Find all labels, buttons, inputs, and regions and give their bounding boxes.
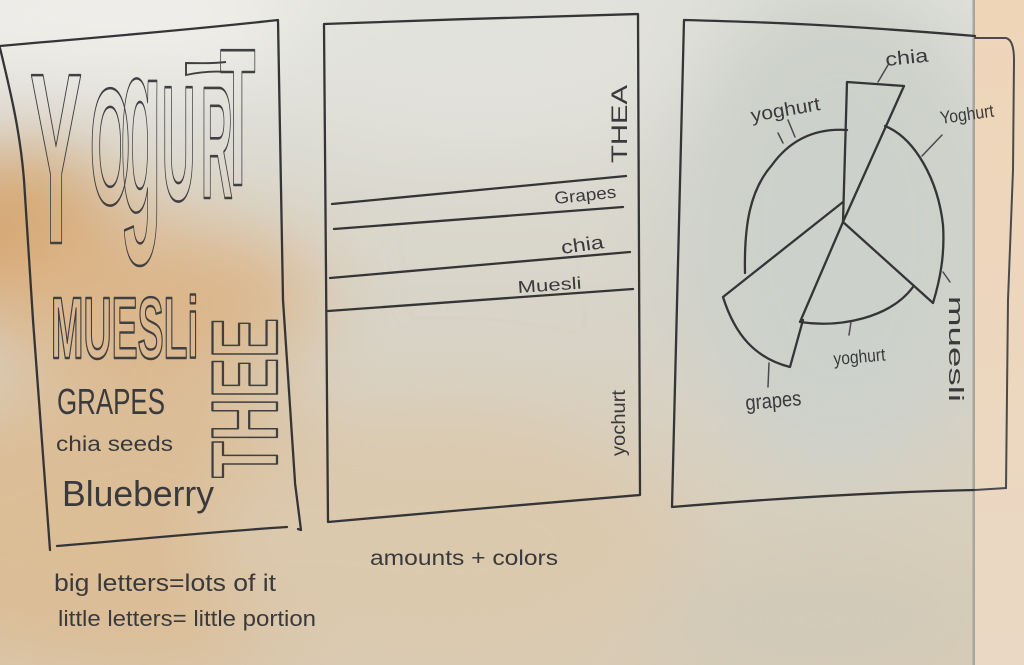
panel 3 outline — [672, 20, 1014, 507]
note: letter size key: big letters=lots of it — [54, 570, 276, 597]
note: letter size key — [54, 570, 316, 631]
slice: yogurt right — [843, 126, 943, 303]
slice: yogurt upper left — [745, 130, 847, 273]
pie chart — [723, 82, 943, 367]
heading: yogurt — [30, 0, 255, 296]
label: blueberry: Blueberry — [62, 473, 214, 514]
heading: yogurt: U — [162, 52, 195, 235]
heading: yogurt: T — [220, 7, 255, 227]
slice: chia — [843, 82, 904, 222]
slice: grapes — [723, 202, 843, 367]
label: grapes: grapes — [744, 387, 802, 415]
panel 1 outline — [0, 20, 301, 550]
panel: exploded pie sketch — [672, 20, 1014, 507]
note: amounts + colors: amounts + colors — [370, 547, 558, 570]
label: chia: chia — [884, 46, 930, 71]
label: yoghurt left: yoghurt — [749, 94, 823, 127]
label: muesli: MUESLi — [51, 281, 198, 377]
label: thea: THEA — [607, 85, 632, 163]
leader lines — [768, 65, 950, 387]
label: muesli: Muesli — [517, 274, 582, 297]
label: grapes: GRAPES — [57, 381, 165, 422]
heading: yogurt: O — [90, 56, 130, 240]
label: muesli: muesli — [944, 296, 966, 402]
slice: yogurt bottom — [800, 222, 913, 324]
layer dividers — [328, 176, 633, 311]
heading: yogurt: R — [201, 53, 233, 232]
heading: yogurt: Y — [30, 23, 82, 296]
panel 2 outline — [324, 14, 640, 522]
label: chia seeds: chia seeds — [56, 433, 173, 456]
panel: layered bars sketch — [324, 14, 640, 522]
label: yoghurt right: Yoghurt — [939, 101, 995, 128]
label: yochurt: yochurt — [609, 389, 630, 456]
panel: word-size sketch — [0, 0, 301, 550]
label: the: THEE — [192, 318, 297, 478]
label: chia: chia — [560, 232, 606, 259]
label: grapes: Grapes — [553, 183, 617, 208]
note: letter size key: little letters= little portion — [58, 606, 316, 631]
label: yoghurt bottom: yoghurt — [833, 345, 886, 369]
